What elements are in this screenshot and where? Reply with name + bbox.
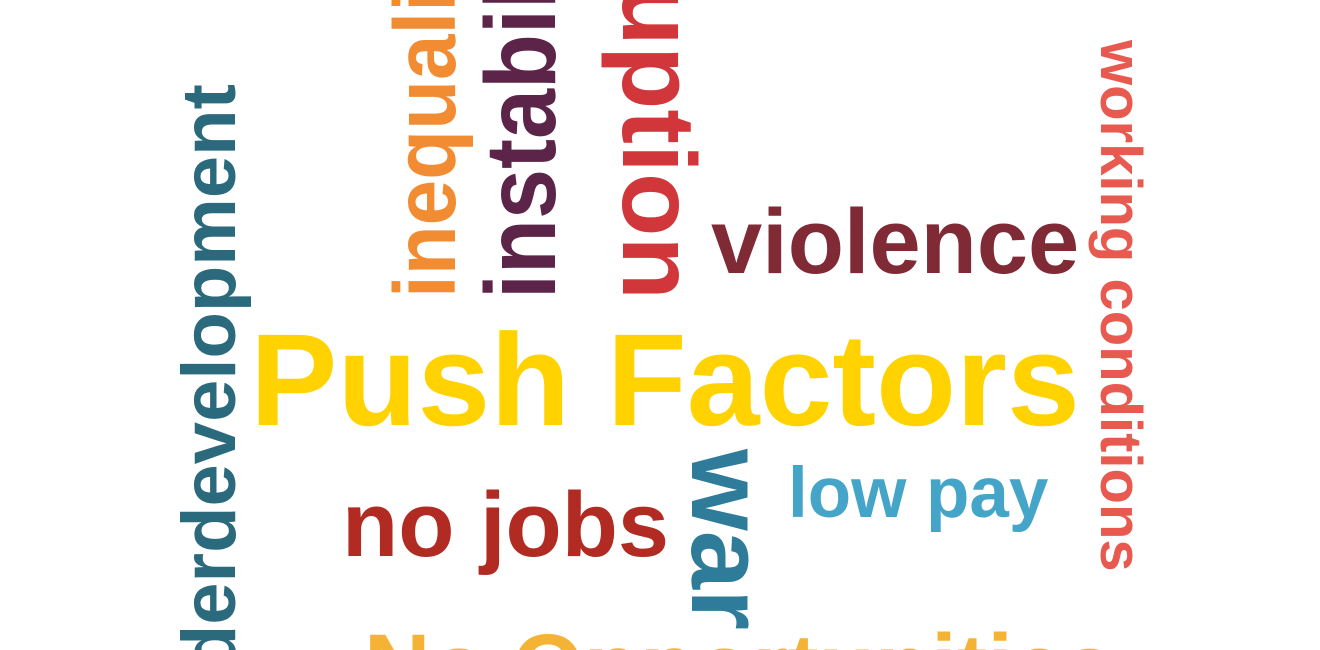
word: war: war xyxy=(669,448,786,630)
title word: Push Factors: Push Factors xyxy=(250,306,1080,453)
word: no jobs: no jobs xyxy=(342,474,669,576)
word: working conditions: working conditions xyxy=(1088,39,1153,572)
word: violence: violence xyxy=(711,191,1079,293)
word: low pay: low pay xyxy=(788,454,1049,533)
